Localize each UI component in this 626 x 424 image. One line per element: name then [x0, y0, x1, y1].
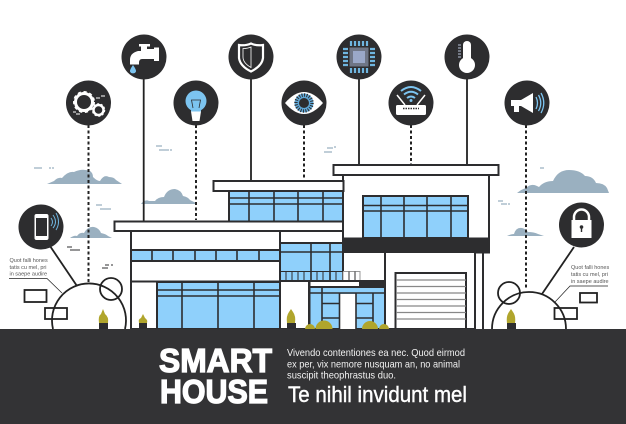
description text: suscipit theophrastus duo. [287, 370, 396, 382]
description text: Vivendo contentiones ea nec. Quod eirmod [287, 347, 465, 359]
right callout text: Quot falli hones [571, 265, 609, 271]
title: smart house: SMART [159, 342, 272, 379]
left callout text: tatis cu mel, pri [10, 265, 46, 271]
middle block [214, 181, 344, 222]
clouds [47, 170, 609, 238]
icon: padlock [559, 202, 604, 248]
title: smart house: HOUSE [160, 373, 268, 410]
right callout text: tatis cu mel, pri [571, 272, 608, 278]
connector lines [88, 79, 526, 290]
icon: chip [336, 34, 382, 80]
icon: router [388, 80, 434, 126]
icon: faucet [122, 34, 166, 80]
icon: shield [228, 34, 274, 80]
house [114, 165, 498, 329]
upper right block [334, 165, 498, 252]
icon: megaphone [504, 80, 550, 126]
title: smart house [159, 342, 272, 410]
tiny sky dashes [34, 146, 544, 209]
footer band [0, 329, 626, 424]
icon: gears [66, 80, 111, 126]
icon: phone [18, 204, 64, 250]
lower left block [114, 222, 343, 329]
right dome with callout [492, 247, 608, 329]
left callout text: in saepe audire [10, 272, 47, 278]
centre balcony [280, 231, 360, 329]
description text [287, 347, 465, 382]
subtitle: Te nihil invidunt mel [288, 382, 467, 407]
bushes and plants [99, 309, 516, 338]
icon: light bulb [174, 80, 218, 126]
left dome with callout [9, 246, 126, 329]
garage [343, 252, 483, 329]
left callout text: Quot falli hones [10, 258, 48, 264]
right callout text: in saepe audire [571, 279, 609, 285]
icon: thermometer [444, 34, 490, 80]
entrance [310, 281, 385, 329]
description text: ex per, vix nemore nusquam an, no animal [287, 358, 460, 370]
icon: eye [282, 80, 326, 126]
